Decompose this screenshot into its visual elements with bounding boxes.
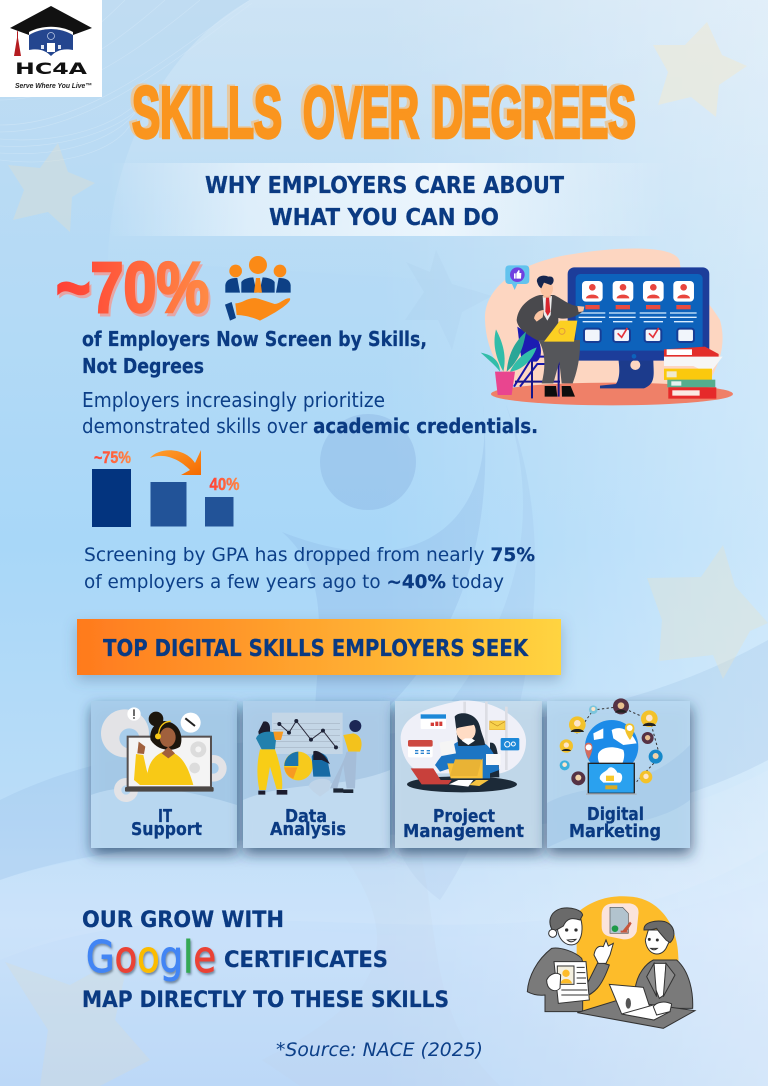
paragraph: employers prioritize skills: Employers increasingly prioritize <box>82 388 385 412</box>
subtitle line 2: WHAT YOU CAN DO <box>269 205 499 231</box>
label: Management <box>403 821 524 842</box>
title: OVER <box>300 72 416 152</box>
big statistic 70%: ~70% <box>58 252 211 331</box>
certificate icon <box>602 903 639 939</box>
heading: grow with google certificates <box>82 908 449 1013</box>
panel: Project Management <box>395 700 542 848</box>
right man <box>635 921 693 1008</box>
title: OVER <box>303 74 419 154</box>
big statistic 70%: ~70% <box>56 249 209 328</box>
label <box>403 806 524 842</box>
label <box>569 804 661 842</box>
label: Marketing <box>569 821 661 842</box>
logo <box>0 0 102 97</box>
bar: middle <box>150 482 186 526</box>
bar chart: GPA screening <box>92 448 240 527</box>
desk and laptop <box>577 984 695 1028</box>
label: IT <box>158 806 173 827</box>
heading: employers screen by skills: of Employers Now Screen by Skills, <box>82 327 427 351</box>
icon: graduation cap <box>10 6 92 56</box>
paragraph: GPA screening: Screening by GPA has dropped from nearly 75% <box>84 544 535 566</box>
title: SKILLS <box>129 72 279 152</box>
subtitle band <box>108 163 668 236</box>
floor <box>491 383 733 405</box>
label: Project <box>433 806 495 827</box>
paragraph: employers prioritize skills: demonstrated skills over academic credentials. <box>82 414 538 438</box>
label: Digital <box>587 804 644 825</box>
label <box>131 806 202 840</box>
line 1: OUR GROW WITH <box>82 908 284 933</box>
label 40%: 40% <box>210 474 240 494</box>
paragraph: employers prioritize skills <box>82 388 538 438</box>
paragraph: GPA screening: of employers a few years ago to ~40% today <box>84 571 504 593</box>
bar: today <box>205 497 234 526</box>
panel: Digital Marketing <box>547 698 690 848</box>
illustration: team with charts <box>256 713 362 797</box>
banner: top digital skills: TOP DIGITAL SKILLS EMPLOYERS SEEK <box>103 636 529 662</box>
candidate cards <box>582 281 694 309</box>
icon: team in hand <box>225 256 291 321</box>
left man <box>527 908 613 1012</box>
source note: *Source: NACE (2025) <box>276 1039 483 1061</box>
line 2: CERTIFICATES <box>224 948 388 973</box>
illustration: project manager <box>401 700 526 792</box>
google logo: Google <box>86 932 216 983</box>
illustration: recruiter and monitor <box>481 249 733 405</box>
banner: top digital skills <box>77 619 561 675</box>
heading: employers screen by skills: Not Degrees <box>82 354 204 378</box>
label <box>270 806 346 840</box>
heading: employers screen by skills <box>82 327 427 378</box>
label: Support <box>131 819 202 840</box>
logo tagline: Serve Where You Live™ <box>15 81 92 90</box>
bar: past <box>92 469 131 527</box>
label: Analysis <box>270 819 346 840</box>
chair and person <box>514 276 584 398</box>
subtitle line 1: WHY EMPLOYERS CARE ABOUT <box>205 173 564 199</box>
logo wordmark: HC4A <box>15 59 88 78</box>
title <box>129 72 636 154</box>
plant <box>481 329 537 395</box>
books <box>664 347 723 399</box>
paragraph: GPA screening <box>84 544 535 593</box>
title: SKILLS <box>132 74 282 154</box>
line 3: MAP DIRECTLY TO THESE SKILLS <box>82 988 449 1013</box>
panel: Data Analysis <box>243 701 390 848</box>
panel: IT Support <box>91 701 237 848</box>
illustration: two colleagues <box>527 896 695 1028</box>
yellow circle <box>577 896 678 1012</box>
thumbs up bubble <box>505 265 529 290</box>
illustration: support agent <box>101 707 227 802</box>
illustration: global marketing network <box>560 698 663 795</box>
label: Data <box>285 806 327 827</box>
checkboxes <box>584 329 694 342</box>
monitor <box>600 358 654 388</box>
peach blob <box>485 249 723 387</box>
arrow <box>150 450 201 475</box>
label 75%: ~75% <box>94 448 131 467</box>
